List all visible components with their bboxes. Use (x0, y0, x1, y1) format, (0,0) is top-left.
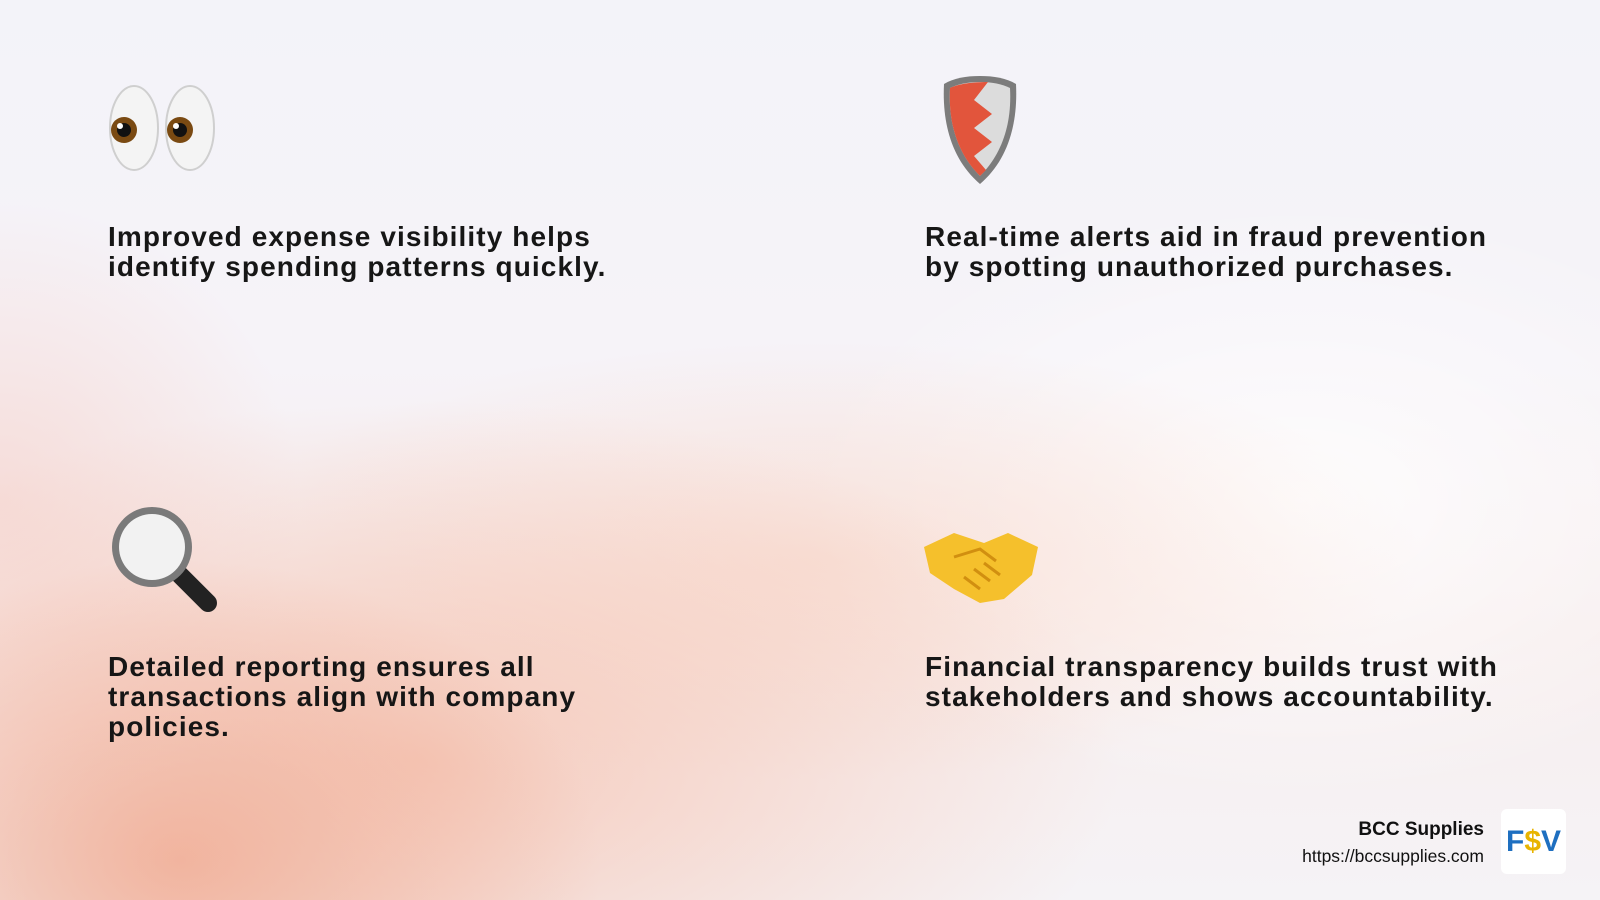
text: fraud prevention: by spotting unauthorized purchases. (925, 251, 1454, 282)
icon: eyes (109, 85, 215, 171)
text: visibility (108, 221, 606, 282)
text: visibility: identify spending patterns quickly. (108, 251, 606, 282)
text: reporting: transactions align with company (108, 681, 576, 712)
text: fraud prevention (925, 221, 1487, 282)
text: reporting (108, 651, 576, 742)
text: reporting: policies. (108, 711, 230, 742)
text: transparency (925, 651, 1498, 712)
footer: brand: BCC Supplies (1358, 819, 1484, 840)
icon: handshake (924, 533, 1038, 603)
text: transparency: Financial transparency builds trust with (925, 651, 1498, 682)
footer: brand (1302, 819, 1484, 866)
icon: magnifier (112, 507, 217, 612)
logo: F$V (1506, 825, 1561, 858)
text: visibility: Improved expense visibility helps (108, 221, 591, 252)
icon: shield (944, 76, 1016, 184)
text: transparency: stakeholders and shows accountability. (925, 681, 1494, 712)
logo (1501, 809, 1566, 874)
text: fraud prevention: Real-time alerts aid in fraud prevention (925, 221, 1487, 252)
footer: brand: https://bccsupplies.com (1302, 846, 1484, 866)
text: reporting: Detailed reporting ensures all (108, 651, 535, 682)
